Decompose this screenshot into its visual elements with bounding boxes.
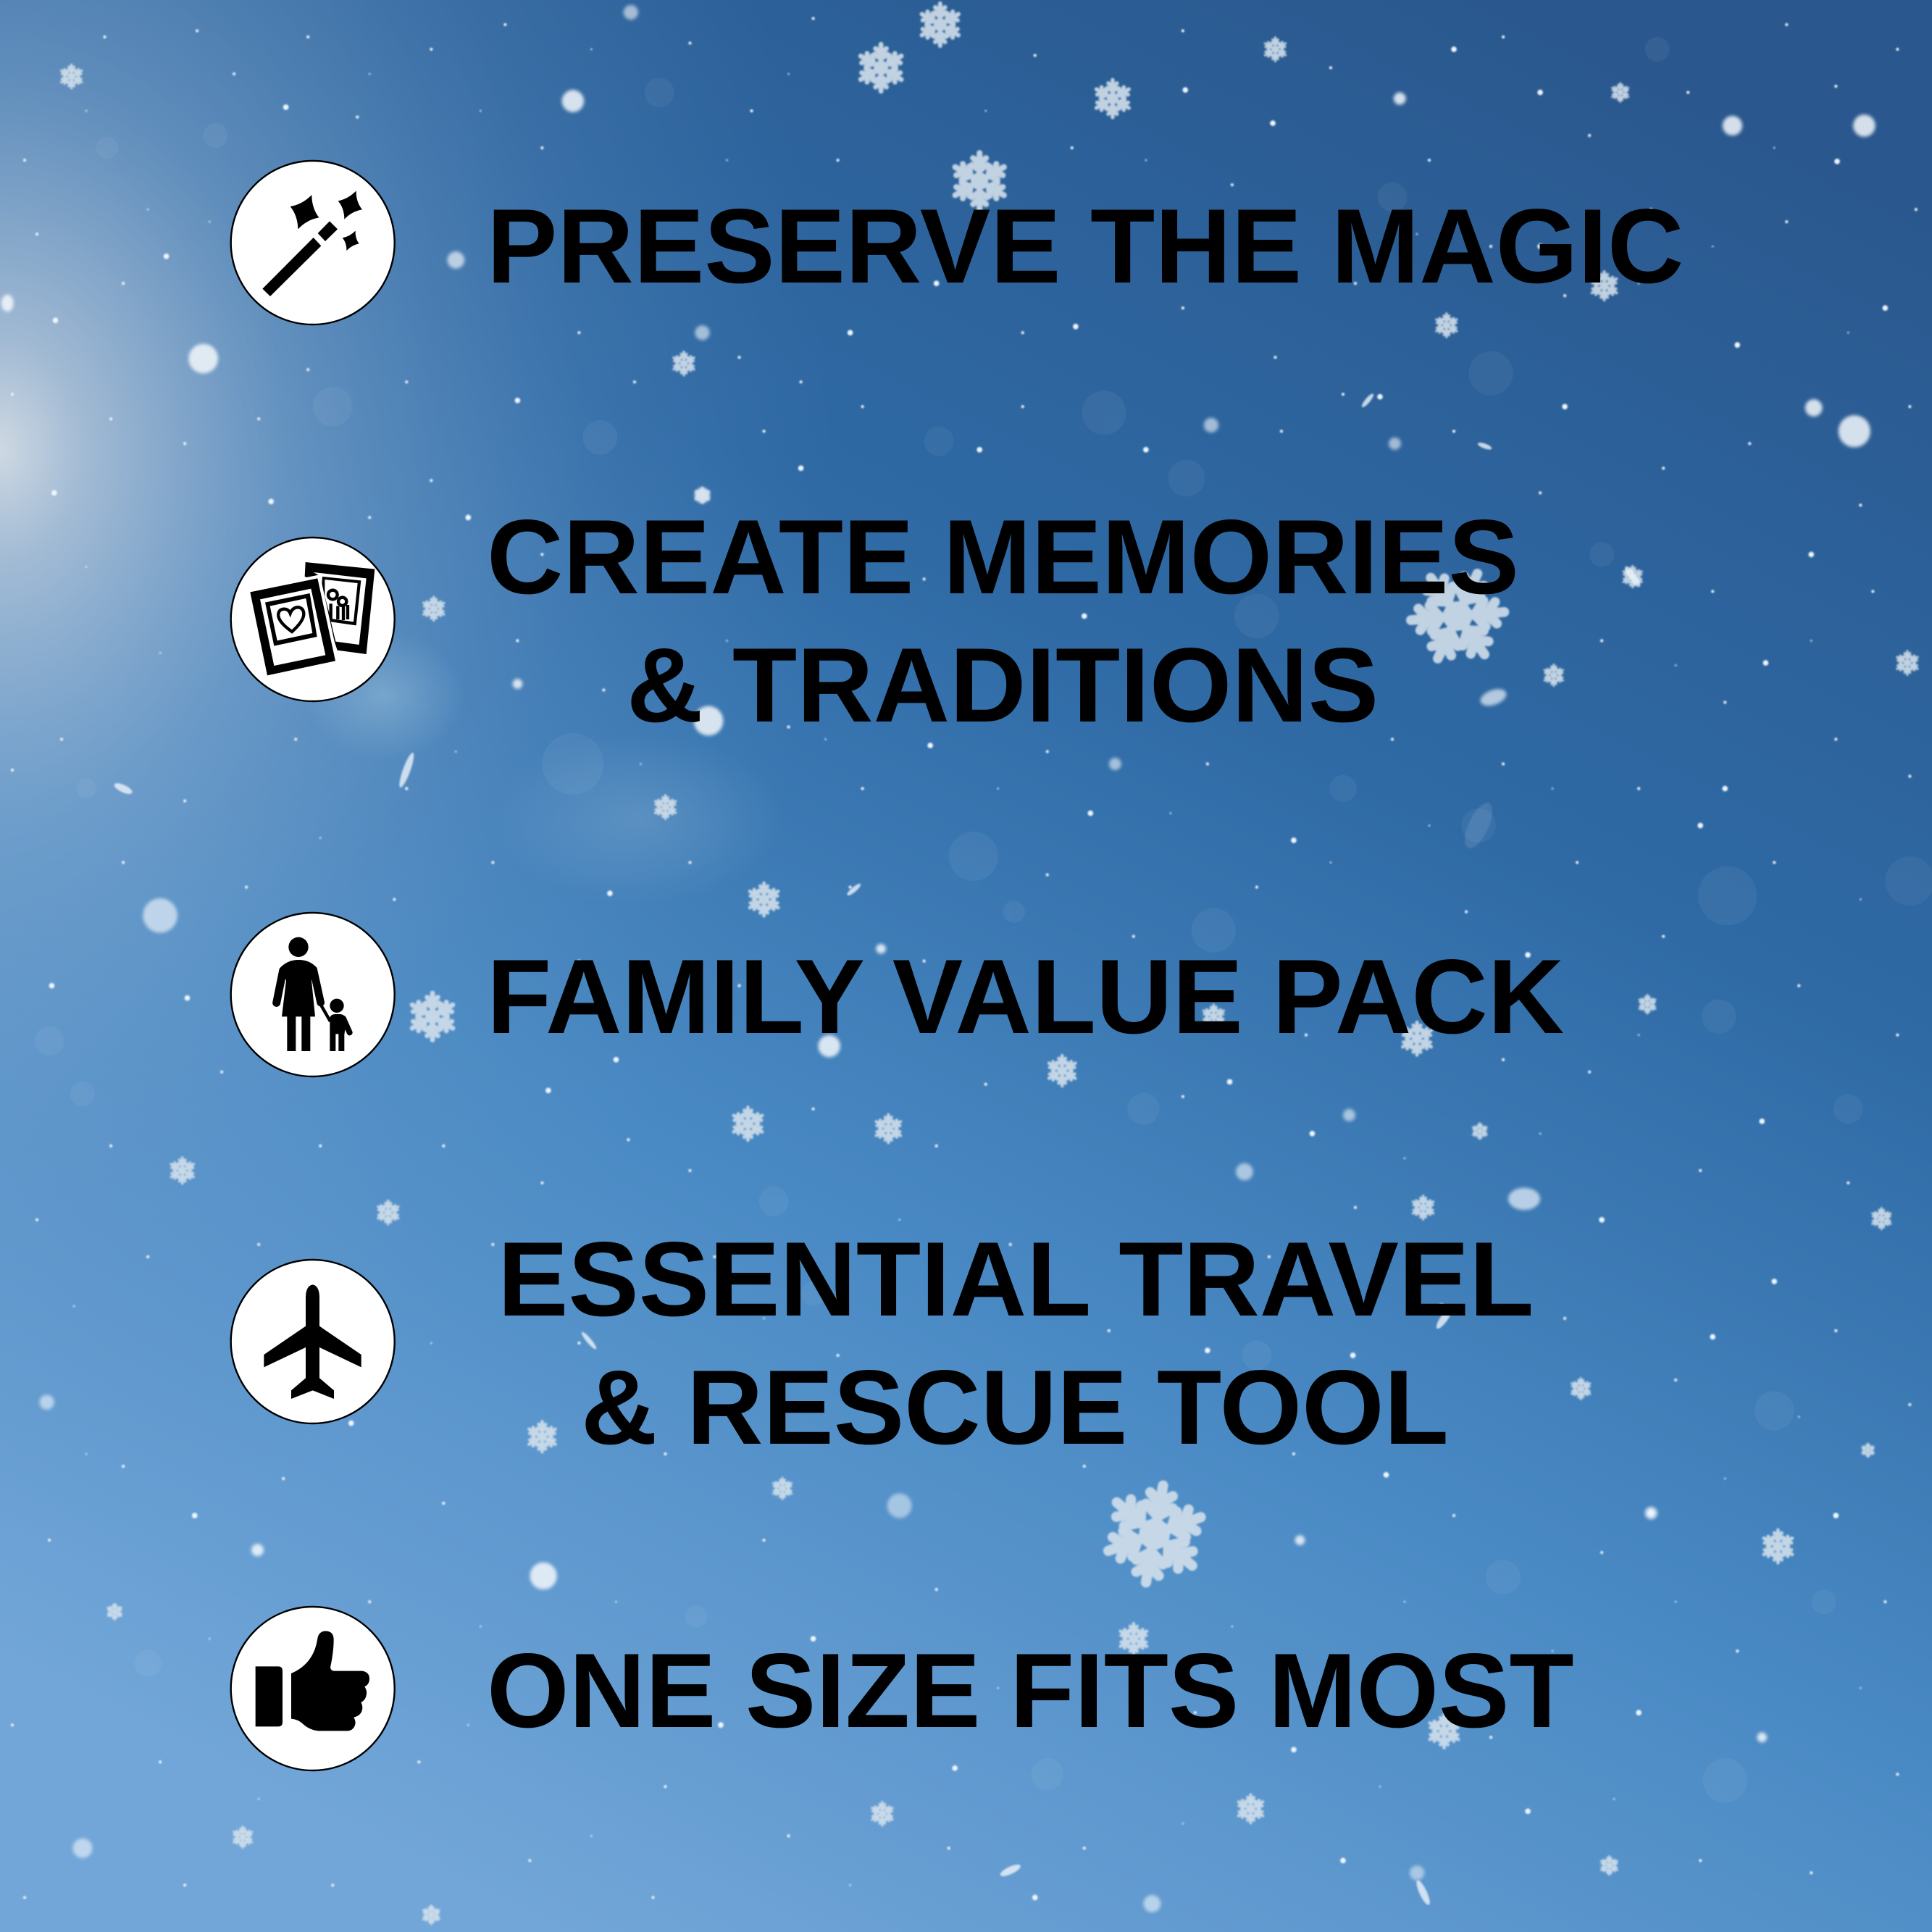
item 4: essential travel and rescue tool bbox=[231, 1220, 1534, 1466]
heading: create memories and traditions: & TRADITIONS bbox=[627, 626, 1379, 744]
heading: essential travel and rescue tool: ESSENTIAL TRAVEL bbox=[498, 1220, 1534, 1338]
item 2: create memories and traditions bbox=[231, 498, 1519, 744]
icon: thumbs up bbox=[231, 1607, 395, 1770]
item 5: one size fits most bbox=[231, 1607, 1574, 1770]
heading: essential travel and rescue tool bbox=[498, 1220, 1534, 1466]
heading: essential travel and rescue tool: & RESCUE TOOL bbox=[581, 1348, 1449, 1466]
heading: one size fits most: ONE SIZE FITS MOST bbox=[487, 1631, 1574, 1749]
icon: magic wand bbox=[231, 161, 395, 325]
heading: create memories and traditions: CREATE MEMORIES bbox=[487, 498, 1519, 616]
heading: preserve the magic: PRESERVE THE MAGIC bbox=[487, 187, 1684, 305]
item 1: preserve the magic bbox=[231, 161, 1684, 325]
streak flakes bbox=[113, 392, 1643, 1907]
icon: airplane bbox=[231, 1260, 395, 1423]
item 3: family value pack bbox=[231, 913, 1564, 1076]
heading: family value pack: FAMILY VALUE PACK bbox=[487, 937, 1564, 1055]
icon: photographs bbox=[231, 538, 395, 701]
heading: create memories and traditions bbox=[487, 498, 1519, 744]
icon: parent and child bbox=[231, 913, 395, 1076]
